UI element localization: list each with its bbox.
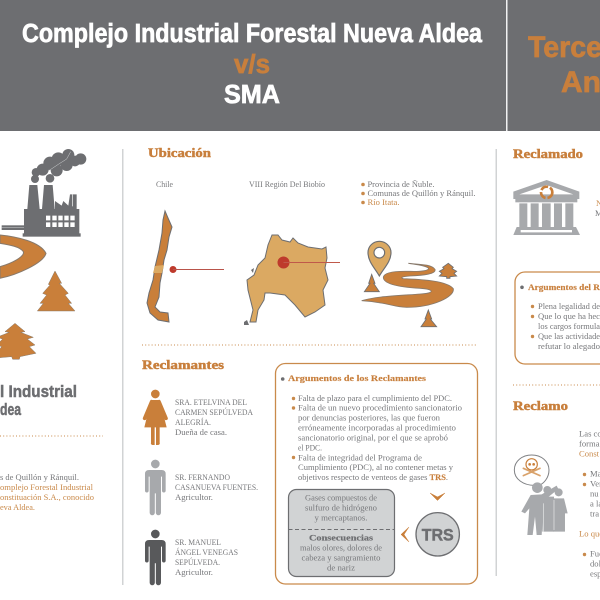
- map: Chile: [147, 211, 224, 322]
- panel: claimants arguments: [276, 364, 478, 584]
- argument list: Falta de integridad del Programa de: [298, 452, 422, 462]
- company name: dea: [0, 400, 21, 419]
- claim text: [579, 429, 600, 579]
- company description: s de Quillón y Ránquil.: [0, 472, 79, 482]
- arrow: left: [401, 527, 409, 542]
- callout: gases and consequences: de nariz: [327, 562, 355, 572]
- claim text: tra: [590, 509, 599, 519]
- claimant 3: SEPÚLVEDA.: [175, 557, 220, 567]
- callout: gases and consequences: Gases compuestos de: [305, 493, 377, 503]
- claimant 1: CARMEN SEPÚLVEDA: [175, 407, 254, 417]
- callout: gases and consequences: [288, 490, 394, 576]
- heading: Reclamo: [513, 399, 568, 413]
- location list: Provincia de Ñuble.: [368, 179, 434, 189]
- icon: river: [0, 235, 46, 278]
- callout: gases and consequences: malos olores, dolores de: [300, 542, 382, 552]
- claimant 3: SR. MANUEL: [175, 537, 221, 547]
- claimant 1: ALEGRÍA.: [175, 417, 211, 427]
- map: region: [244, 235, 340, 325]
- panel: location: [147, 146, 476, 327]
- claim text: nu: [590, 489, 599, 499]
- claimant 1: SRA. ETELVINA DEL: [175, 397, 247, 407]
- claim text: forma: [579, 439, 600, 449]
- panel: defendant arguments: Plena legalidad de: [538, 301, 600, 311]
- claimant 3: [175, 537, 238, 577]
- callout: gases and consequences: sulfuro de hidrógeno: [305, 503, 377, 513]
- argument list: por denuncias posteriores, las que fueron: [298, 412, 441, 422]
- icon: man: [145, 460, 166, 515]
- argument list: erróneamente incorporadas al procedimiento: [298, 422, 456, 432]
- panel: defendant arguments: Que lo que ha hec: [538, 311, 600, 321]
- title: Complejo Industrial Forestal Nueva Aldea: [22, 20, 483, 48]
- heading: Ubicación: [148, 146, 211, 160]
- claimant 2: SR. FERNANDO: [175, 472, 230, 482]
- icon: woman: [144, 390, 167, 445]
- panel: defendant arguments: Que las actividade: [538, 331, 600, 341]
- claimant 1: Dueña de casa.: [175, 427, 227, 437]
- icon: people with speech bubble: [514, 455, 568, 535]
- icon: tree: [37, 271, 75, 311]
- icon: man dark: [145, 530, 166, 585]
- defendant name: [595, 198, 600, 218]
- panel: claimants: [142, 358, 258, 585]
- header band: [0, 0, 600, 131]
- heading: Reclamado: [513, 147, 583, 161]
- company description: [0, 472, 94, 512]
- callout: gases and consequences: y mercaptanos.: [314, 513, 368, 523]
- claimant 3: ÁNGEL VENEGAS: [175, 547, 238, 557]
- argument list: el PDC.: [298, 442, 322, 452]
- versus: v/s: [234, 51, 270, 79]
- heading: Argumentos de los Reclamantes: [288, 373, 427, 383]
- company description: onstituación S.A., conocido: [0, 492, 94, 502]
- company name: [0, 382, 77, 419]
- company description: omplejo Forestal Industrial: [0, 482, 94, 492]
- location list: Río Itata.: [368, 197, 400, 207]
- panel: claim: [513, 399, 600, 579]
- heading: Reclamantes: [142, 358, 224, 372]
- claim text: Const: [579, 449, 600, 459]
- icon: river with pin: [362, 241, 457, 327]
- company name: l Industrial: [0, 382, 77, 401]
- panel: defendant: [513, 147, 600, 364]
- label: Chile: Chile: [156, 179, 173, 189]
- label: region: VIII Región Del Biobío: [249, 179, 325, 189]
- icon: TRS circle: TRS: [422, 526, 454, 544]
- right header second line: An: [561, 66, 600, 99]
- argument list: objetivos respecto de venteos de gases TRS.: [298, 472, 448, 482]
- panel: defendant arguments: [515, 272, 600, 364]
- claimant 3: Agricultor.: [175, 567, 213, 577]
- argument list: sancionatorio original, por el que se aprobó: [298, 432, 448, 442]
- panel: company: [0, 149, 103, 512]
- callout: gases and consequences: Consecuencias: [309, 533, 374, 543]
- callout: gases and consequences: cabeza y sangramiento: [302, 552, 380, 562]
- location list: Comunas de Quillón y Ránquil.: [368, 188, 476, 198]
- claimant 1: [175, 397, 254, 437]
- argument list: [292, 393, 462, 482]
- icon: institution building: [513, 180, 580, 235]
- icon: round tree: [0, 323, 36, 359]
- opponent name: SMA: [224, 81, 280, 109]
- panel: defendant arguments: los cargos formula: [538, 321, 600, 331]
- argument list: Falta de un nuevo procedimiento sancionatorio: [298, 402, 462, 412]
- panel: defendant arguments: refutar lo alegado: [538, 341, 600, 351]
- arrow: down: [430, 493, 445, 500]
- claimant 2: [175, 472, 258, 502]
- claimant 2: CASANUEVA FUENTES.: [175, 482, 258, 492]
- icon: TRS circle: [416, 513, 459, 556]
- argument list: Falta de plazo para el cumplimiento del PDC.: [298, 393, 452, 403]
- icon: factory: [2, 149, 86, 237]
- claimant 2: Agricultor.: [175, 492, 213, 502]
- panel: defendant arguments: Argumentos del R: [528, 282, 600, 292]
- location list: [361, 179, 476, 207]
- company description: eva Aldea.: [0, 502, 35, 512]
- argument list: Cumplimiento (PDC), al no contener metas y: [298, 462, 454, 472]
